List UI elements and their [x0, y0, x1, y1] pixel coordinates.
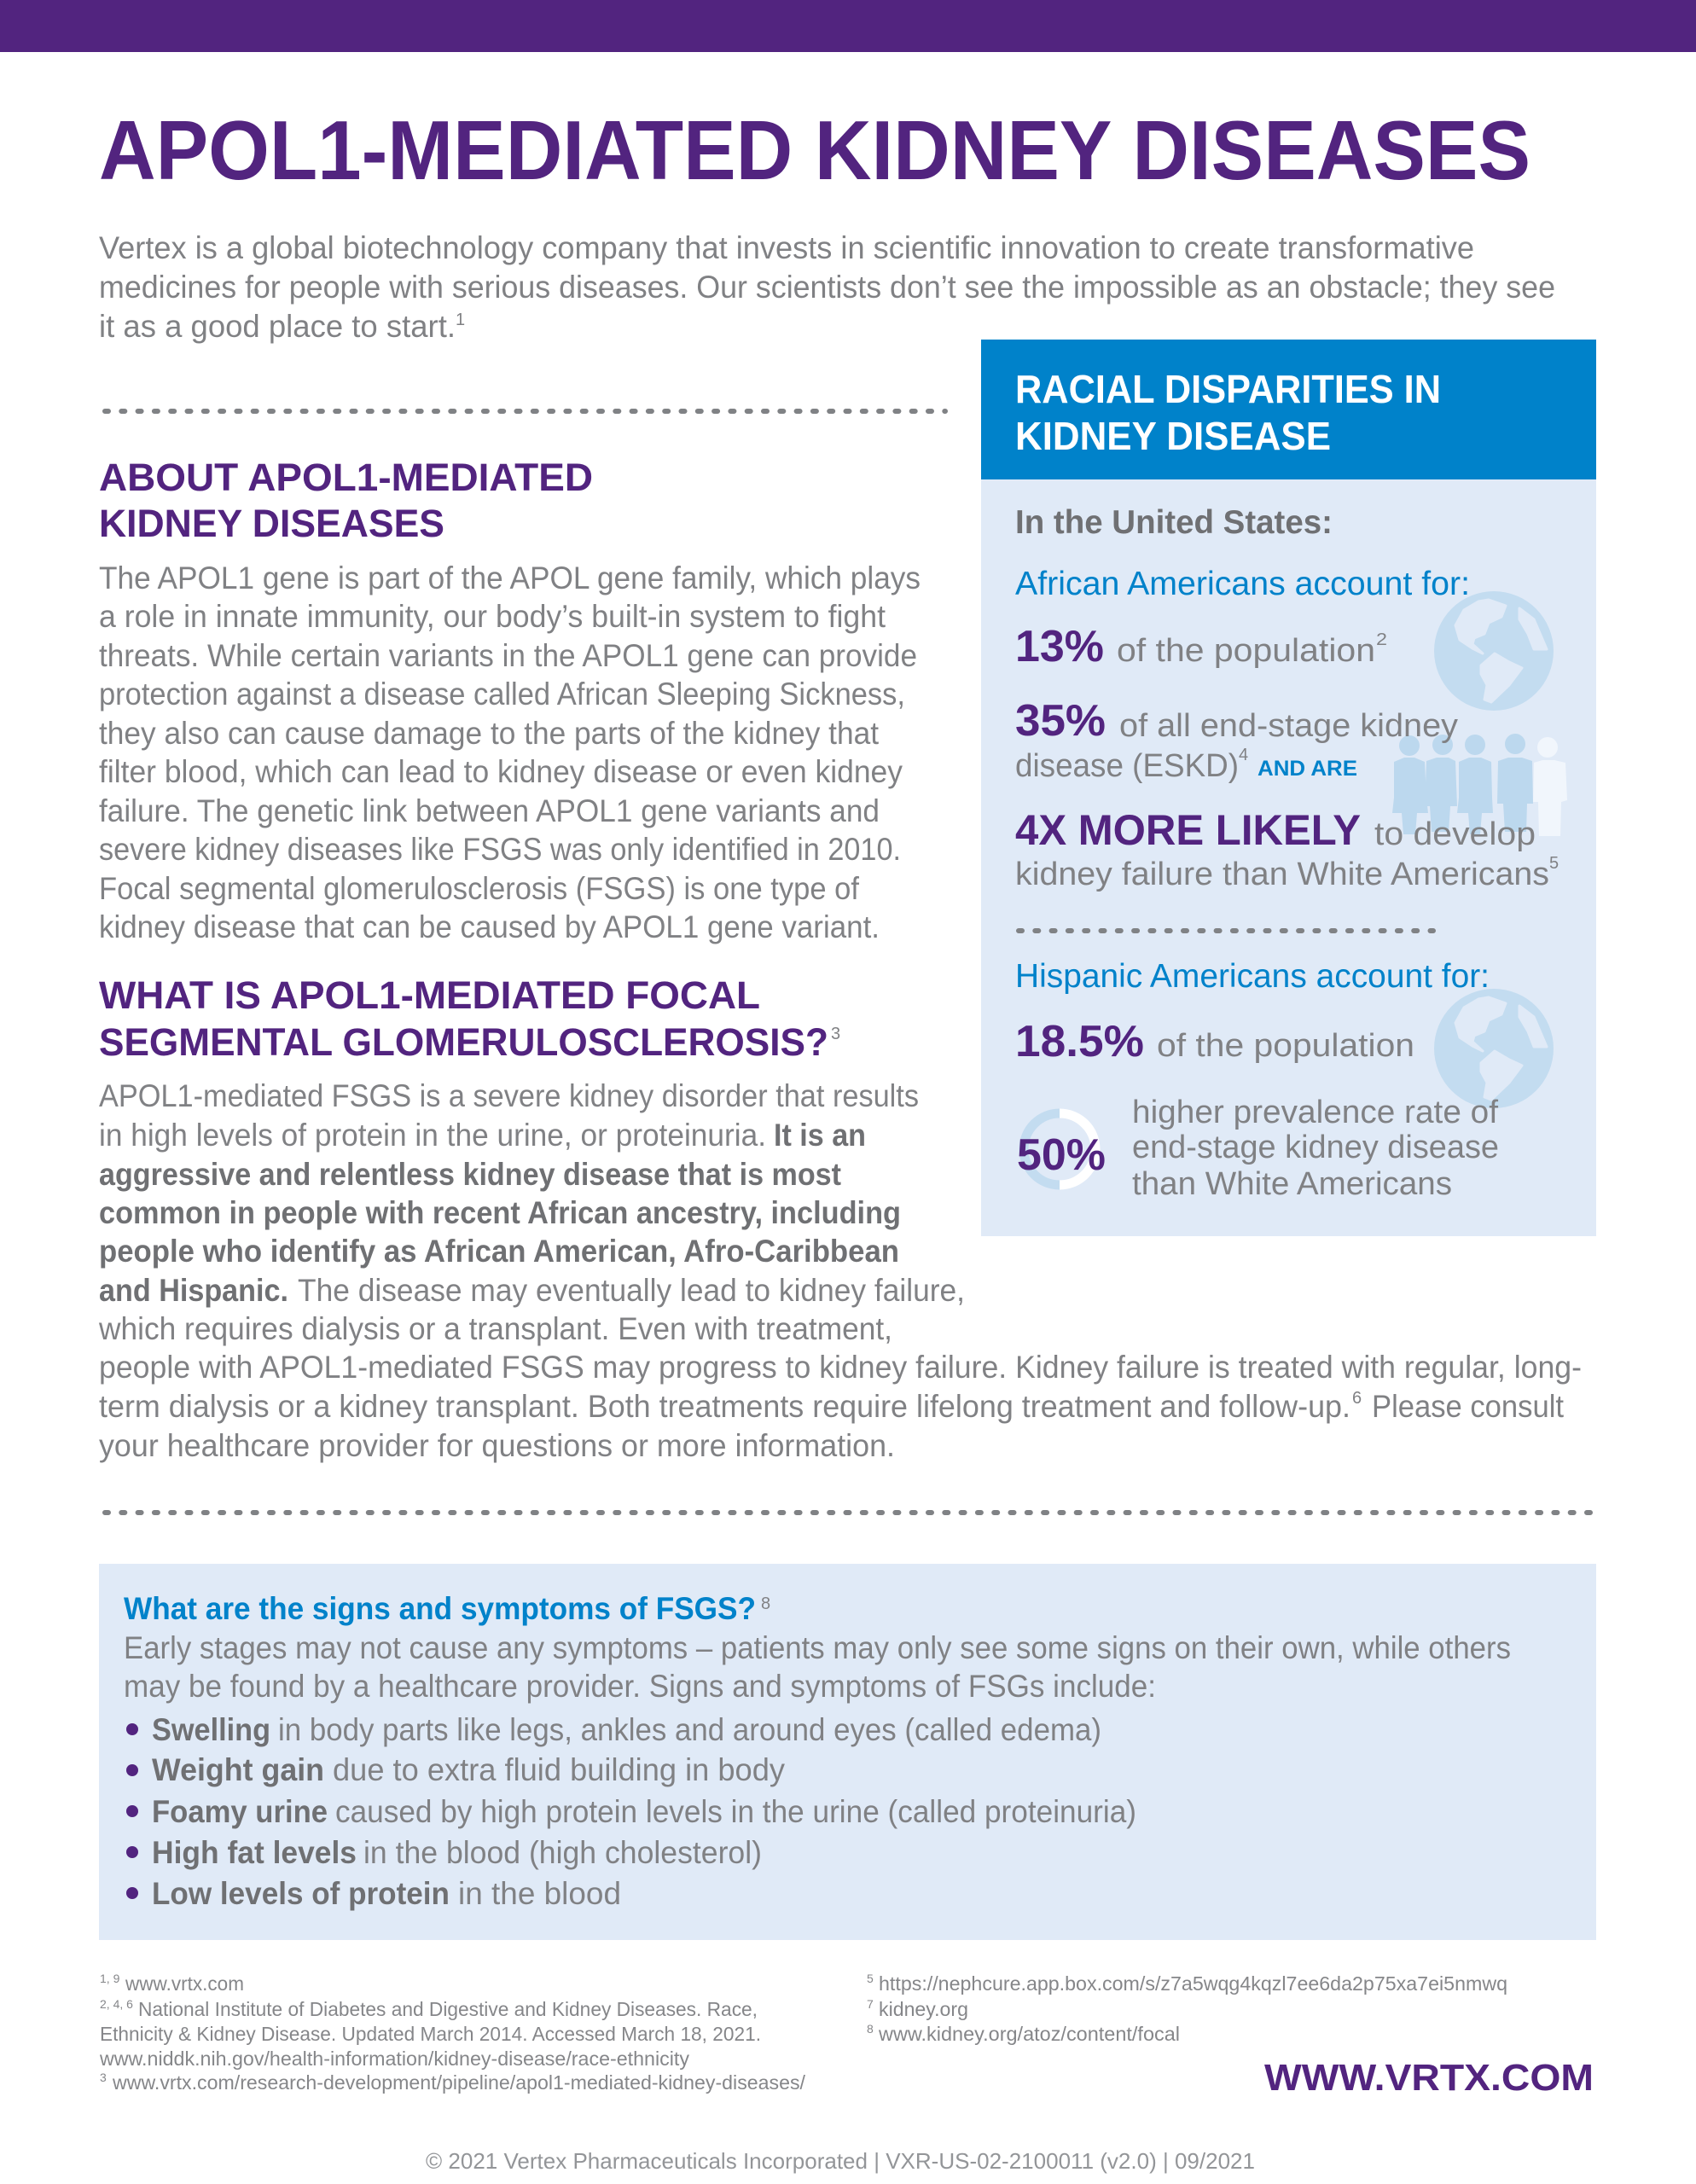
text block: what is FSGS: The disease may eventually lead to kidney failure,	[298, 1273, 965, 1308]
symptom list: in body parts like legs, ankles and around eyes (called edema)	[278, 1712, 1101, 1747]
stat: 35%: 4	[1239, 746, 1248, 764]
symptom list: in the blood (high cholesterol)	[363, 1835, 762, 1870]
text block: what is FSGS: your healthcare provider for questions or more information.	[99, 1428, 895, 1463]
panel: racial disparities	[981, 340, 1596, 1236]
panel intro text: may be found by a healthcare provider. Signs and symptoms of FSGs include:	[124, 1669, 1156, 1704]
stat: 18.5%	[1015, 1017, 1414, 1066]
text block: about: a role in innate immunity, our body’s built-in system to fight	[99, 599, 886, 634]
footnotes left: www.vrtx.com	[125, 1972, 244, 1995]
stat: 18.5%: of the population	[1157, 1028, 1414, 1064]
panel intro text: Early stages may not cause any symptoms – patients may only see some signs on their own, while others	[124, 1630, 1511, 1665]
footnotes right: 7	[867, 1997, 874, 2011]
footnotes left: www.vrtx.com/research-development/pipeline/apol1-mediated-kidney-diseases/	[112, 2071, 806, 2094]
subheading: in the United States: In the United States:	[1015, 504, 1333, 541]
panel background	[981, 479, 1596, 1236]
stat: 13%: of the population	[1117, 633, 1375, 669]
symptom list: High fat levels	[152, 1835, 357, 1870]
stat: 4X more likely: 5	[1549, 854, 1559, 873]
text block: what is FSGS: term dialysis or a kidney transplant. Both treatments require lifelong treatment and follow-up.	[99, 1389, 1350, 1424]
panel: signs and symptoms	[99, 1564, 1596, 1940]
icon: half ring chart	[1024, 1113, 1095, 1185]
footnotes right: www.kidney.org/atoz/content/focal	[878, 2023, 1180, 2045]
panel header: RACIAL DISPARITIES IN	[1015, 367, 1441, 411]
icon: globe top	[1434, 591, 1554, 711]
heading: about	[99, 456, 593, 545]
symptom list: in the blood	[458, 1876, 621, 1911]
text block: what is FSGS: APOL1-mediated FSGS is a severe kidney disorder that results	[99, 1078, 919, 1113]
footnotes left: National Institute of Diabetes and Digestive and Kidney Diseases. Race,	[138, 1998, 758, 2020]
stat: 50%: higher prevalence rate of	[1132, 1095, 1498, 1130]
intro text: it as a good place to start.	[99, 309, 456, 344]
footnotes left: 2, 4, 6	[100, 1997, 133, 2011]
text block: what is FSGS: 6	[1352, 1389, 1362, 1408]
panel header: KIDNEY DISEASE	[1015, 414, 1331, 458]
text block: what is FSGS: people who identify as African American, Afro-Caribbean	[99, 1234, 899, 1269]
stat: 35%	[1015, 696, 1458, 784]
subheading: Hispanic Americans: Hispanic Americans account for:	[1015, 958, 1490, 995]
stat: 35%: of all end-stage kidney	[1119, 708, 1458, 744]
text block: about: failure. The genetic link between APOL1 gene variants and	[99, 793, 880, 828]
footnotes left: Ethnicity & Kidney Disease. Updated March 2014. Accessed March 18, 2021.	[100, 2023, 761, 2045]
subheading: African Americans: African Americans account for:	[1015, 566, 1470, 602]
stat: 18.5%: 18.5%	[1015, 1017, 1144, 1066]
stat: 50%	[1017, 1095, 1499, 1202]
heading: about: KIDNEY DISEASES	[99, 502, 444, 545]
text block: about: they also can cause damage to the parts of the kidney that	[99, 716, 880, 751]
stat: 4X more likely: kidney failure than White Americans	[1015, 857, 1549, 892]
text block: what is FSGS: common in people with recent African ancestry, including	[99, 1195, 901, 1230]
heading: what is FSGS: WHAT IS APOL1-MEDIATED FOCAL	[99, 973, 760, 1017]
text block: about: threats. While certain variants in the APOL1 gene can provide	[99, 638, 917, 673]
intro text: 1	[456, 311, 465, 329]
icon: group of people	[1392, 734, 1567, 836]
stat: 13%: 2	[1376, 630, 1387, 649]
stat: 50%: end-stage kidney disease	[1132, 1130, 1499, 1165]
symptom list: Weight gain	[152, 1752, 324, 1787]
footnotes left: 1, 9	[100, 1972, 120, 1985]
footnotes left	[99, 1972, 806, 2094]
text block: about: The APOL1 gene is part of the APOL gene family, which plays	[99, 561, 921, 595]
copyright: © 2021 Vertex Pharmaceuticals Incorporated | VXR-US-02-2100011 (v2.0) | 09/2021	[426, 2148, 1255, 2174]
footnotes right: 8	[867, 2022, 874, 2036]
text block: what is FSGS: which requires dialysis or a transplant. Even with treatment,	[98, 1311, 892, 1346]
footnotes right	[867, 1972, 1507, 2045]
stat: 4X more likely	[1015, 806, 1559, 892]
text block: what is FSGS: aggressive and relentless kidney disease that is most	[99, 1157, 841, 1192]
stat: 35%: disease (ESKD)	[1015, 748, 1239, 784]
text block: what is FSGS: in high levels of protein in the urine, or proteinuria.	[99, 1118, 766, 1153]
panel heading: 8	[761, 1594, 770, 1613]
text block: what is FSGS	[98, 1078, 1582, 1463]
footnotes left: www.niddk.nih.gov/health-information/kidney-disease/race-ethnicity	[99, 2048, 689, 2070]
website link: WWW.VRTX.COM	[1264, 2057, 1594, 2099]
stat: 35%: AND ARE	[1257, 757, 1357, 781]
text block: about: filter blood, which can lead to kidney disease or even kidney	[99, 754, 903, 789]
stat: 13%: 13%	[1015, 622, 1104, 671]
icon: globe bottom	[1434, 989, 1554, 1108]
text block: what is FSGS: Please consult	[1372, 1389, 1565, 1424]
heading: what is FSGS	[99, 973, 840, 1064]
footnotes left: 3	[100, 2071, 107, 2084]
panel heading: What are the signs and symptoms of FSGS?	[124, 1591, 756, 1626]
footnotes right: 5	[867, 1972, 874, 1985]
footnotes right: https://nephcure.app.box.com/s/z7a5wqg4kqzl7ee6da2p75xa7ei5nmwq	[879, 1972, 1507, 1995]
panel intro text	[124, 1630, 1511, 1704]
text block: about: severe kidney diseases like FSGS was only identified in 2010.	[99, 832, 901, 867]
panel header	[981, 340, 1596, 479]
symptom list: caused by high protein levels in the urine (called proteinuria)	[335, 1794, 1136, 1829]
heading: what is FSGS: 3	[831, 1025, 840, 1043]
symptom list: Low levels of protein	[152, 1876, 450, 1911]
footnotes right: kidney.org	[879, 1998, 968, 2020]
heading: about: ABOUT APOL1-MEDIATED	[99, 456, 593, 499]
text block: about: Focal segmental glomerulosclerosis (FSGS) is one type of	[99, 871, 860, 906]
symptom list: Foamy urine	[152, 1794, 328, 1829]
stat: 13%	[1015, 622, 1387, 671]
symptom list: Swelling	[152, 1712, 270, 1747]
title: APOL1-MEDIATED KIDNEY DISEASES	[99, 103, 1530, 197]
top purple bar	[0, 0, 1696, 52]
text block: what is FSGS: It is an	[774, 1118, 866, 1153]
heading: what is FSGS: SEGMENTAL GLOMERULOSCLEROSIS?	[99, 1020, 828, 1064]
intro text: medicines for people with serious diseases. Our scientists don’t see the impossible as an obstacle; they see	[99, 270, 1555, 305]
stat: 35%: 35%	[1015, 696, 1106, 746]
text block: about	[99, 561, 921, 944]
stat: 50%: 50%	[1017, 1130, 1106, 1180]
symptom list	[126, 1712, 1136, 1911]
panel background	[99, 1564, 1596, 1940]
intro text: Vertex is a global biotechnology company that invests in scientific innovation to create transformative	[99, 230, 1474, 265]
text block: about: kidney disease that can be caused by APOL1 gene variant.	[99, 909, 880, 944]
stat: 4X more likely: to develop	[1374, 816, 1536, 852]
stat: 50%: than White Americans	[1132, 1166, 1452, 1202]
intro text	[99, 230, 1555, 344]
stat: 4X more likely: 4X MORE LIKELY	[1015, 806, 1361, 854]
text block: what is FSGS: people with APOL1-mediated FSGS may progress to kidney failure. Kidney failure is treated with regular, long-	[99, 1350, 1582, 1385]
text block: about: protection against a disease called African Sleeping Sickness,	[99, 677, 905, 712]
symptom list: due to extra fluid building in body	[333, 1752, 785, 1787]
text block: what is FSGS: and Hispanic.	[99, 1273, 288, 1308]
